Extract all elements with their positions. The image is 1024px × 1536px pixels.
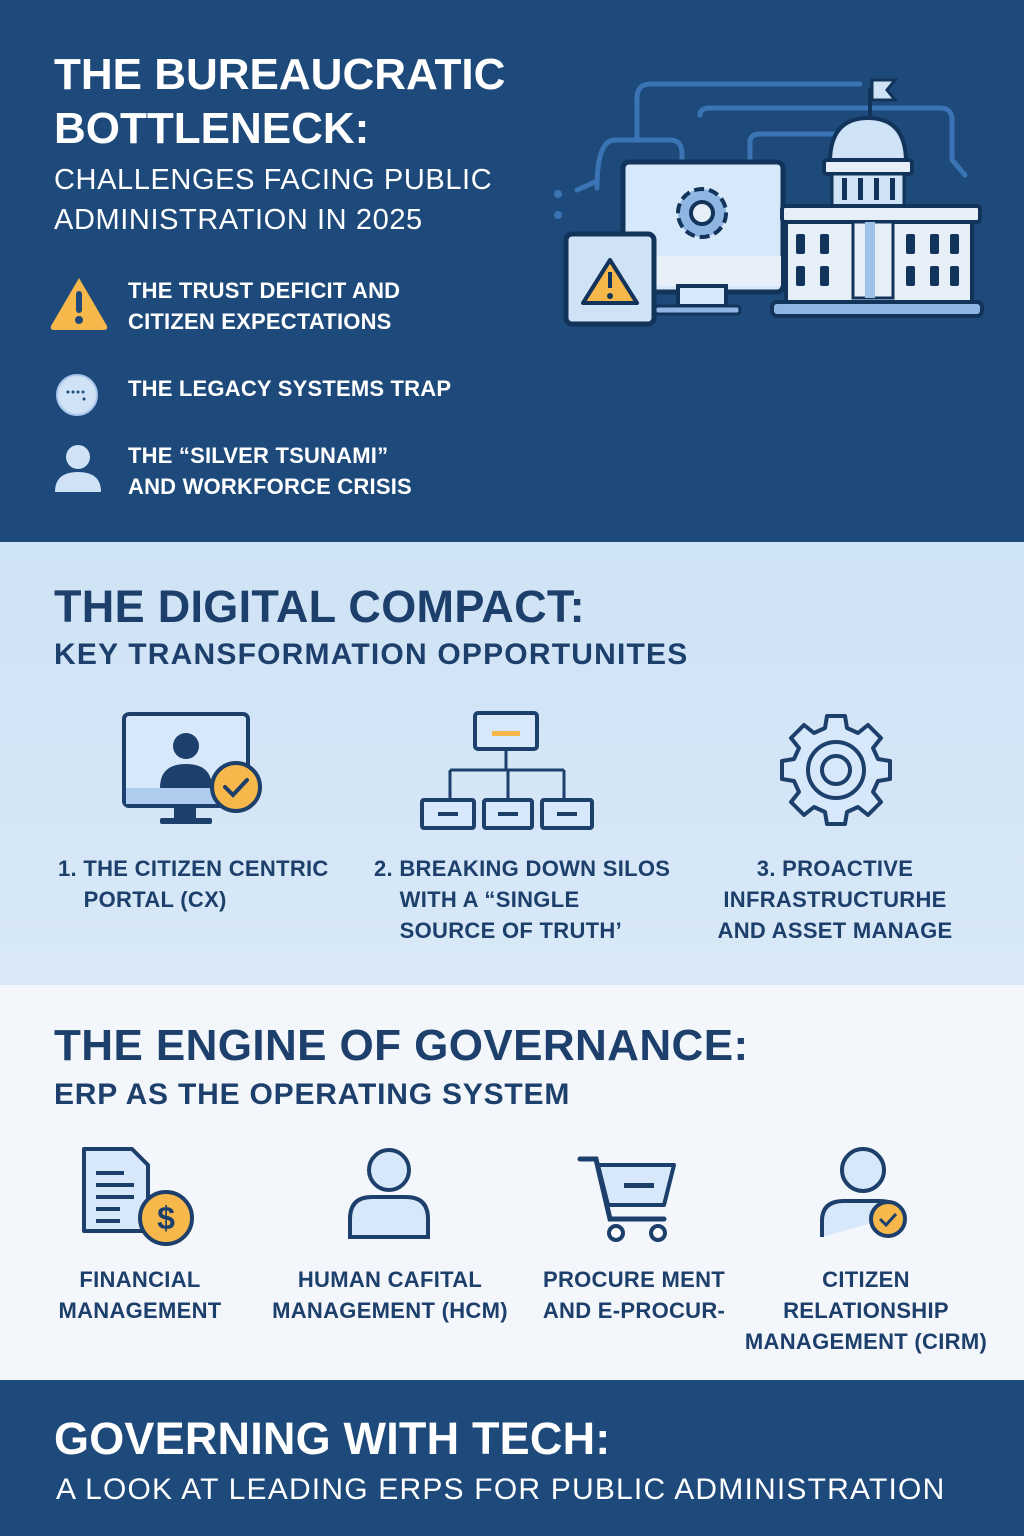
challenge 3: THE “SILVER TSUNAMI” [128,443,388,468]
heading: THE ENGINE OF GOVERNANCE: [54,1021,748,1070]
label: CRM: MANAGEMENT (CIRM) [745,1329,987,1354]
heading: THE DIGITAL COMPACT: [54,581,585,632]
label: HCM [272,1267,508,1323]
footer: governing with tech [0,1380,1024,1536]
opportunity 3: 3. PROACTIVE [757,856,913,881]
icon: gear [780,714,892,826]
opportunity 1: 1. THE CITIZEN CENTRIC [58,856,329,881]
label: CRM [745,1267,987,1354]
icon: financial document: $ [157,1200,175,1236]
opportunity 3: INFRASTRUCTURHE [723,887,947,912]
warning card [566,234,654,324]
label: HCM: MANAGEMENT (HCM) [272,1298,508,1323]
monitor [623,162,783,292]
icon: person [55,445,101,492]
title [54,50,505,153]
section: digital compact [0,542,1024,985]
label: procurement: PROCURE MENT [543,1267,725,1292]
footer subtitle: A LOOK AT LEADING ERPS FOR PUBLIC ADMINISTRATION [56,1473,945,1506]
label: HCM: HUMAN CAFITAL [298,1267,482,1292]
title: BOTTLENECK: [54,104,369,153]
subheading: ERP AS THE OPERATING SYSTEM [54,1078,570,1111]
subtitle: CHALLENGES FACING PUBLIC [54,164,492,196]
challenge 2: THE LEGACY SYSTEMS TRAP [128,376,451,401]
icon: person [348,1148,430,1239]
capitol [868,88,872,118]
label: procurement: AND E-PROCUR- [543,1298,725,1323]
challenge 1: THE TRUST DEFICIT AND [128,278,400,303]
opportunity 1 [58,856,329,912]
opportunity 3 [718,856,952,943]
subtitle: ADMINISTRATION IN 2025 [54,204,423,236]
icon: portal monitor [122,712,262,824]
icon: chat bubble [56,374,98,416]
challenge 1: CITIZEN EXPECTATIONS [128,309,392,334]
illustration: government computer [554,78,984,326]
icon: citizen check [820,1147,907,1238]
label: CRM: CITIZEN [822,1267,910,1292]
label: financial [58,1267,222,1323]
section: bureaucratic bottleneck [0,0,1024,542]
subtitle [54,164,492,236]
icon: cart [578,1156,676,1242]
label: CRM: RELATIONSHIP [783,1298,949,1323]
challenge 1 [128,278,400,334]
opportunity 2: WITH A “SINGLE [400,887,579,912]
label: procurement [543,1267,725,1323]
subheading: KEY TRANSFORMATION OPPORTUNITES [54,638,688,671]
icon: financial document [82,1147,194,1246]
opportunity 2 [374,856,670,943]
gear [678,189,726,237]
icon: warning [50,278,108,330]
label: financial: FINANCIAL [79,1267,201,1292]
opportunity 2: SOURCE OF TRUTH’ [400,918,622,943]
section: engine of governance [0,985,1024,1380]
challenge 3 [128,443,412,499]
icon: org chart [420,711,594,830]
opportunity 2: 2. BREAKING DOWN SILOS [374,856,670,881]
label: financial: MANAGEMENT [58,1298,222,1323]
opportunity 1: PORTAL (CX) [84,887,227,912]
challenge 3: AND WORKFORCE CRISIS [128,474,412,499]
opportunity 3: AND ASSET MANAGE [718,918,952,943]
title: THE BUREAUCRATIC [54,50,505,99]
footer title: GOVERNING WITH TECH: [54,1413,610,1464]
